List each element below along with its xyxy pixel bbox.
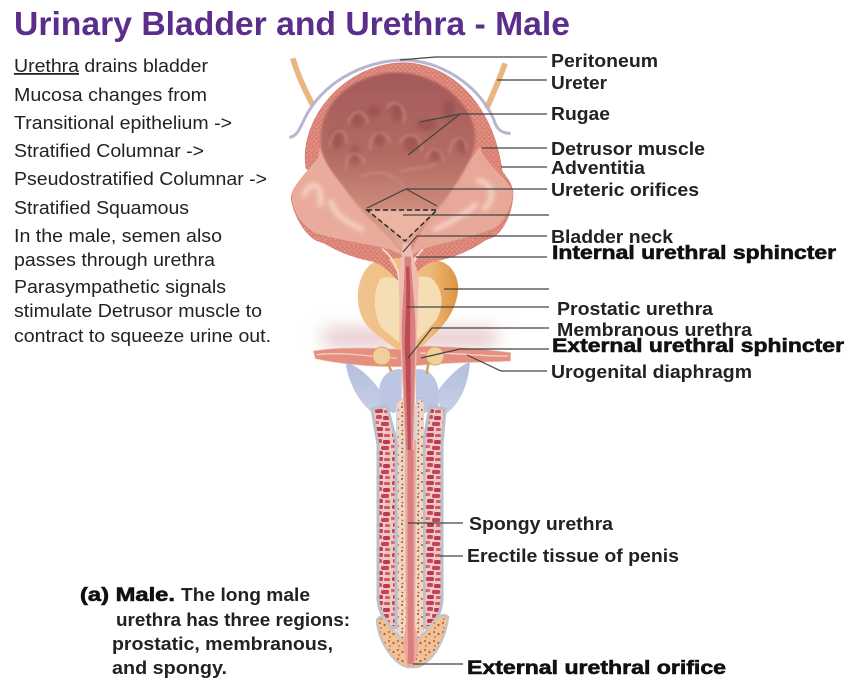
label: Ureteric orifices — [367, 179, 699, 208]
text block: urethra description: Stratified Columnar -> — [14, 141, 204, 161]
urethra core — [402, 257, 416, 450]
prostate gland — [358, 258, 458, 355]
right lobe underside — [403, 163, 513, 280]
text block: urethra description: stimulate Detrusor muscle to — [14, 301, 262, 321]
text block: urethra description: Urethra drains bladder — [14, 56, 208, 76]
blurred fascia — [323, 329, 497, 346]
caption: The long male — [181, 585, 310, 605]
right lobe surface — [407, 147, 513, 258]
caption — [80, 585, 350, 678]
neck white stripes — [382, 249, 423, 281]
lobe folds — [303, 180, 492, 230]
label: Peritoneum: Peritoneum — [551, 50, 658, 71]
label: Spongy urethra: Spongy urethra — [469, 513, 614, 534]
urethra — [399, 243, 419, 450]
left lobe underside — [291, 158, 408, 280]
illustration: prostate and diaphragm — [313, 258, 511, 415]
text block: urethra description: Stratified Squamous — [14, 198, 189, 218]
caption: prostatic, membranous, — [112, 634, 333, 654]
urethra lumen — [408, 440, 414, 664]
prostate inner left — [375, 277, 399, 343]
label: Prostatic urethra: Prostatic urethra — [557, 298, 714, 319]
illustration: penis shaft — [372, 398, 448, 667]
label: Rugae: Rugae — [551, 103, 610, 124]
right ureter — [487, 63, 505, 108]
label: Bladder neck: Bladder neck — [551, 226, 674, 247]
peritoneum — [289, 60, 511, 137]
label: Rugae — [408, 103, 610, 155]
corpus spongiosum — [398, 398, 423, 640]
muscular wall — [305, 63, 503, 200]
label: Ureteric orifices: Ureteric orifices — [551, 179, 699, 200]
trigone — [367, 210, 437, 241]
label: Adventitia: Adventitia — [551, 157, 646, 178]
left neck muscle — [315, 237, 399, 281]
lumen — [321, 73, 475, 255]
label: Ureter — [497, 72, 607, 93]
label: External urethral orifice: External urethral orifice — [467, 658, 726, 679]
label: External urethral sphincter — [421, 336, 845, 358]
left lobe surface — [292, 147, 406, 257]
caption: and spongy. — [112, 658, 227, 678]
leader: trigone — [403, 214, 549, 216]
label: Urogenital diaphragm: Urogenital diaphragm — [551, 361, 752, 382]
left corpus cavernosum — [372, 406, 396, 628]
text block: urethra description: passes through urethra — [14, 250, 216, 270]
shaft urethra — [403, 440, 419, 667]
text block: urethra description: Transitional epithelium -> — [14, 113, 232, 133]
rugae folds — [330, 100, 467, 187]
illustration: bladder — [289, 58, 513, 280]
label: Membranous urethra — [408, 319, 753, 358]
left bulb wing — [346, 363, 383, 415]
label: Urogenital diaphragm — [467, 355, 752, 382]
text block: urethra description: In the male, semen also — [14, 226, 222, 246]
label: Internal urethral sphincter: Internal urethral sphincter — [552, 243, 837, 264]
label: Peritoneum — [400, 50, 658, 71]
urethra pale sides — [399, 243, 419, 450]
text block: urethra description: Mucosa changes from — [14, 85, 207, 105]
text block: urethra description: Pseudostratified Columnar -> — [14, 169, 267, 189]
title: Urinary Bladder and Urethra - Male — [14, 5, 570, 42]
caption: urethra has three regions: — [116, 610, 350, 630]
dashed triangle — [367, 210, 437, 241]
spongiosum base — [396, 404, 424, 645]
text block: urethra description — [14, 56, 271, 346]
bulbourethral glands — [373, 347, 444, 374]
urethra lumen — [405, 267, 411, 450]
diaphragm fibres — [317, 353, 508, 358]
glans penis — [377, 615, 448, 667]
label: External urethral sphincter: External urethral sphincter — [552, 336, 845, 357]
caption: (a) Male. — [80, 585, 175, 606]
prostate inner right — [417, 276, 442, 341]
right bulb wing — [435, 362, 470, 415]
label: Erectile tissue of penis: Erectile tissue of penis — [467, 545, 679, 566]
label: Ureter: Ureter — [551, 72, 607, 93]
label: Detrusor muscle: Detrusor muscle — [551, 138, 705, 159]
text block: urethra description: Parasympathetic signals — [14, 277, 226, 297]
right corpus cavernosum — [424, 406, 445, 628]
left central bulb — [379, 369, 402, 413]
bladder neck muscle — [315, 229, 498, 281]
right central bulb — [416, 369, 438, 413]
urogenital diaphragm — [313, 346, 511, 367]
label: Bladder neck — [403, 226, 674, 252]
right neck muscle — [409, 229, 498, 281]
text block: urethra description: contract to squeeze urine out. — [14, 326, 271, 346]
left ureter — [293, 58, 313, 105]
leader: prostate — [444, 288, 549, 290]
label: Membranous urethra: Membranous urethra — [557, 319, 753, 340]
